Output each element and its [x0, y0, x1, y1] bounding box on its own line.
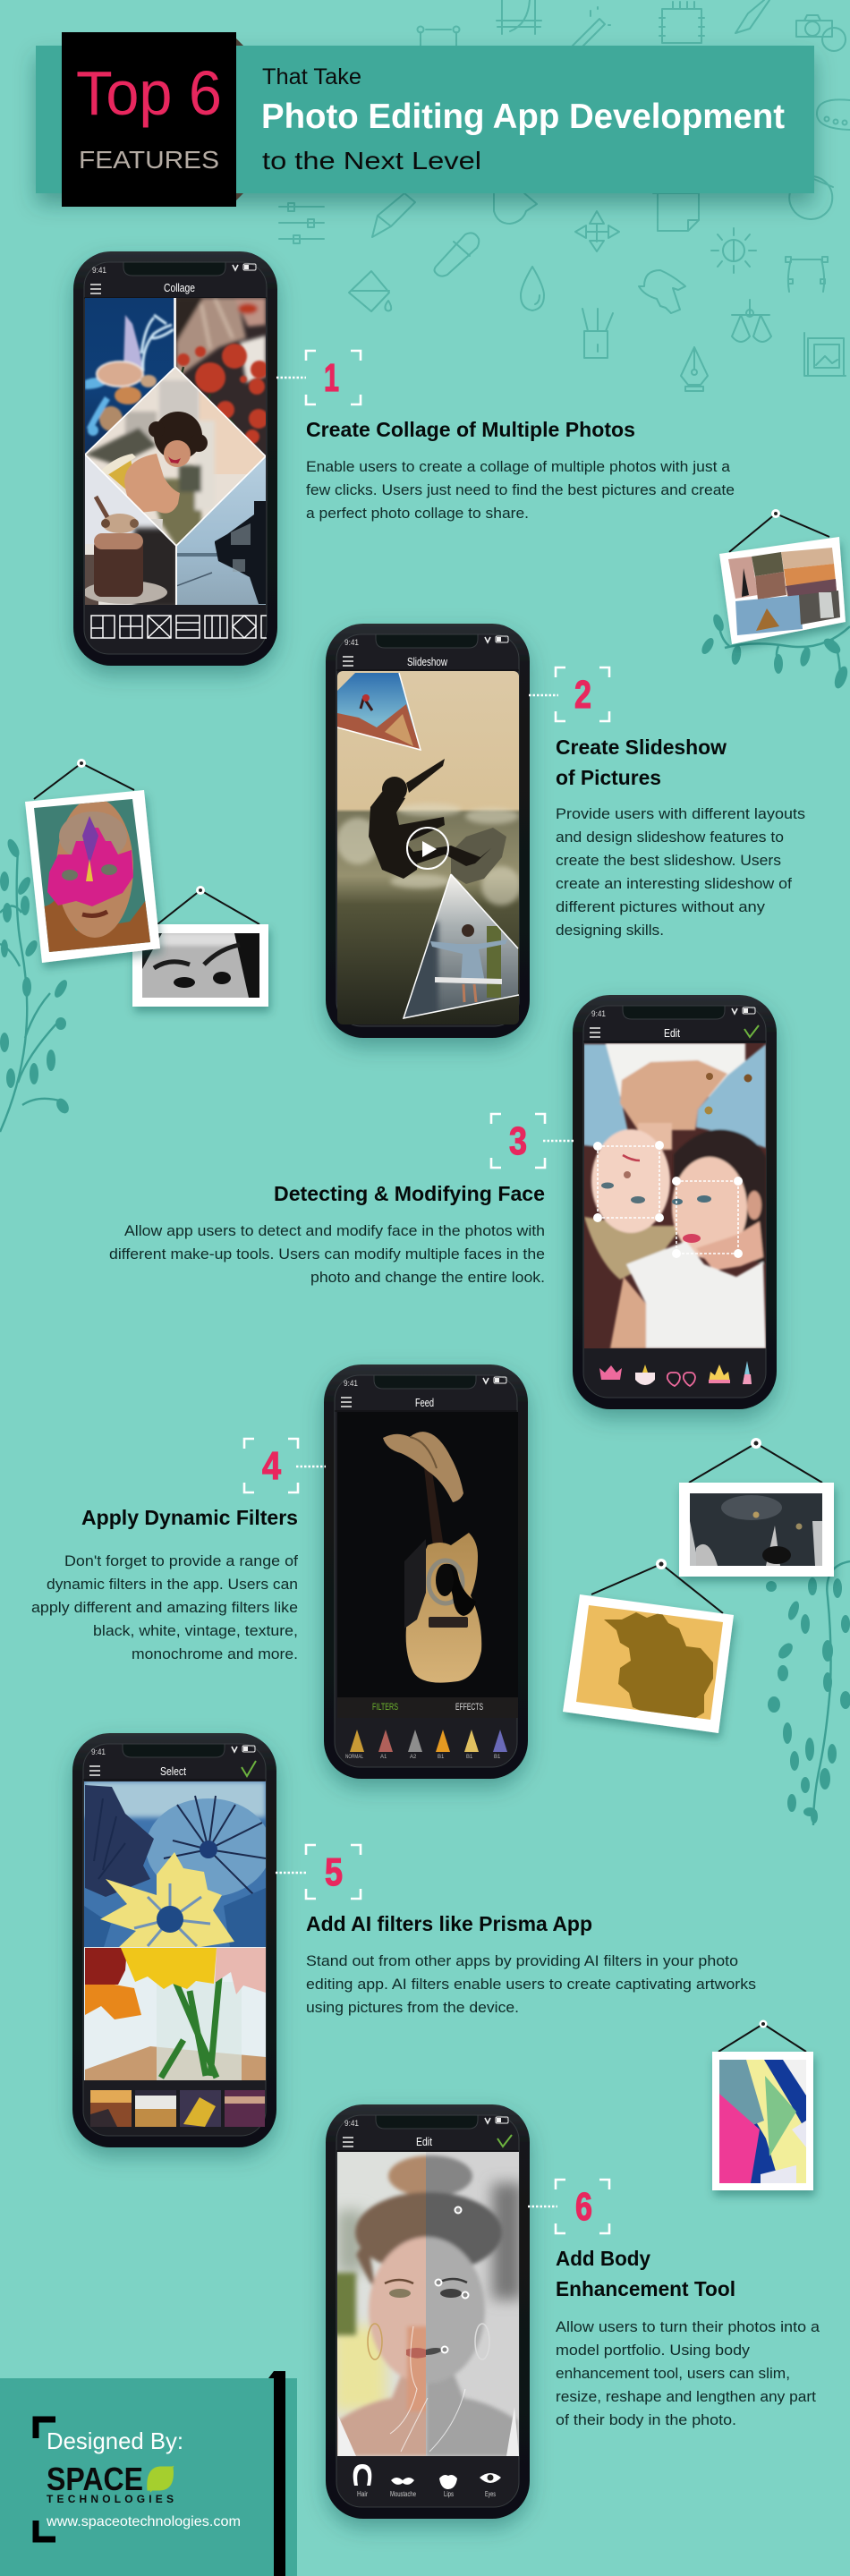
- tool icons: [353, 2464, 501, 2489]
- feature 6: heading: Enhancement Tool: [556, 2277, 735, 2300]
- feature 4: description: apply different and amazing filters like: [31, 1600, 298, 1616]
- phone 3: edit: [573, 995, 777, 1409]
- tool labels: Moustache: [390, 2490, 416, 2498]
- feature 4: description: monochrome and more.: [132, 1646, 298, 1662]
- hanging frame 1: [719, 509, 846, 644]
- feature 2: number marker: [529, 667, 609, 721]
- footer band: [0, 2378, 297, 2576]
- website: www.spaceotechnologies.com: [46, 2514, 241, 2529]
- logo: TECHNOLOGIES: [47, 2493, 174, 2505]
- hanging frame 2: [25, 759, 160, 963]
- tabs: FILTERS: [372, 1702, 398, 1713]
- feature 2: description: and design slideshow features to: [556, 829, 784, 846]
- hanging frame 5: [563, 1559, 734, 1733]
- feature 5: number marker: [276, 1845, 361, 1899]
- feature 6: heading: Add Body: [556, 2247, 650, 2270]
- feature 5: description: [306, 1953, 756, 2016]
- two women photo: [583, 1043, 766, 1348]
- status time: 9:41: [91, 1747, 106, 1756]
- phone frame: [326, 2104, 530, 2519]
- feature 3: description: different make-up tools. Users can modify multiple faces in the: [109, 1246, 545, 1262]
- footer bar: [268, 2371, 285, 2576]
- slideshow photo: [336, 671, 523, 1024]
- feature 4: description: [31, 1553, 298, 1662]
- feature 2: description: [556, 806, 805, 939]
- feature 6: description: resize, reshape and lengthen any part: [556, 2389, 816, 2405]
- background line icons: [279, 0, 850, 391]
- feature 1: description: a perfect photo collage to share.: [306, 506, 529, 522]
- subtitle bottom: to the Next Level: [262, 147, 481, 174]
- right branch: [766, 1561, 850, 1825]
- thumbnails: [90, 2090, 265, 2127]
- status time: 9:41: [591, 1009, 606, 1018]
- feature 6: number marker: [528, 2180, 609, 2233]
- feature 1: heading: Create Collage of Multiple Photos: [306, 418, 635, 441]
- phone frame: [573, 995, 777, 1409]
- tool labels: Eyes: [485, 2490, 496, 2498]
- painted flower photo: [84, 1781, 271, 2080]
- filter thumbnails: B1: [466, 1755, 473, 1760]
- play button: [407, 828, 448, 869]
- phone 5: select: [72, 1733, 276, 2147]
- phone frame: [324, 1365, 528, 1779]
- header banner: [36, 32, 814, 207]
- hanging frame 4: [679, 1438, 834, 1577]
- screen title: Collage: [164, 281, 195, 294]
- feature 2: description: Provide users with different layouts: [556, 806, 805, 822]
- banner fold: [236, 38, 243, 200]
- title: Top 6: Top 6: [76, 58, 222, 128]
- feature 2: description: create an interesting slideshow of: [556, 876, 792, 892]
- feature 6: description: enhancement tool, users can slim,: [556, 2366, 790, 2382]
- feature 1: description: Enable users to create a collage of multiple photos with just a: [306, 459, 731, 475]
- feature 6: description: model portfolio. Using body: [556, 2342, 751, 2359]
- check icon: [744, 1025, 759, 1037]
- feature 5: description: editing app. AI filters enable users to create captivating artworks: [306, 1977, 756, 1993]
- feature 5: heading: Add AI filters like Prisma App: [306, 1912, 592, 1935]
- phone frame: [73, 251, 277, 666]
- feature 3: description: [109, 1223, 545, 1286]
- feature 4: description: dynamic filters in the app. Users can: [47, 1577, 298, 1593]
- feature 6: description: [556, 2319, 820, 2428]
- feature 2: description: create the best slideshow. Users: [556, 853, 781, 869]
- feature 6: description: Allow users to turn their photos into a: [556, 2319, 820, 2335]
- feature 2: number marker: 2: [574, 673, 591, 717]
- sticker icons: [599, 1361, 752, 1386]
- feature 1: number marker: 1: [324, 356, 339, 400]
- feature 5: number marker: 5: [325, 1850, 343, 1894]
- screen title: Select: [160, 1764, 186, 1778]
- feature 4: heading: Apply Dynamic Filters: [81, 1506, 298, 1529]
- feature 3: heading: Detecting & Modifying Face: [274, 1182, 545, 1205]
- feature 6: heading: [556, 2247, 735, 2300]
- feature 2: heading: Create Slideshow: [556, 735, 727, 759]
- surfer: [369, 759, 445, 879]
- dark photo area: [337, 1412, 518, 1697]
- screen title: Slideshow: [407, 655, 447, 668]
- tool labels: [357, 2490, 496, 2498]
- filter thumbnails: B1: [494, 1755, 501, 1760]
- feature 4: description: black, white, vintage, texture,: [93, 1623, 298, 1639]
- feature 2: description: different pictures without any: [556, 899, 766, 915]
- designed by: Designed By:: [47, 2427, 183, 2454]
- phone 4: feed: [324, 1365, 528, 1779]
- feature 3: description: Allow app users to detect and modify face in the photos with: [124, 1223, 545, 1239]
- feature 1: description: [306, 459, 735, 522]
- check icon: [497, 2135, 512, 2147]
- black title box: [62, 32, 236, 207]
- screen title: Edit: [664, 1026, 680, 1040]
- check icon: [242, 1761, 256, 1776]
- face detection boxes: [593, 1141, 743, 1258]
- feature 3: description: photo and change the entire look.: [310, 1270, 545, 1286]
- filter thumbnails: NORMAL: [345, 1755, 364, 1760]
- tool labels: Lips: [444, 2490, 454, 2498]
- portrait photo: [333, 2152, 523, 2456]
- feature 5: description: Stand out from other apps by providing AI filters in your photo: [306, 1953, 738, 1969]
- screen title: Edit: [416, 2135, 432, 2148]
- corner brackets: [36, 2419, 55, 2539]
- feature 3: number marker: [491, 1114, 574, 1168]
- phone 1: collage: [73, 251, 277, 666]
- feature 6: description: of their body in the photo.: [556, 2412, 736, 2428]
- branch under frame 1: [700, 613, 850, 690]
- phone 2: slideshow: [326, 624, 530, 1038]
- collage photo: [83, 298, 268, 608]
- feature 1: description: few clicks. Users just need to find the best pictures and create: [306, 482, 735, 498]
- filter thumbnails: B1: [438, 1755, 445, 1760]
- main title: Photo Editing App Development: [261, 98, 785, 136]
- hanging frame 6: [712, 2020, 813, 2190]
- layout icons: [91, 616, 267, 638]
- status time: 9:41: [344, 1379, 358, 1388]
- feature 2: heading: of Pictures: [556, 766, 661, 789]
- title: features: FEATURES: [79, 146, 219, 174]
- feature 4: number marker: [244, 1439, 326, 1492]
- banner band: [36, 46, 814, 193]
- guitar with hat: [383, 1432, 481, 1683]
- feature 2: heading: [556, 735, 727, 789]
- feature 3: number marker: 3: [509, 1119, 527, 1163]
- logo: SPACE: [47, 2461, 143, 2497]
- hat: [383, 1432, 463, 1502]
- filter thumbnails: A2: [410, 1755, 417, 1760]
- status time: 9:41: [92, 266, 106, 275]
- feature 1: number marker: [276, 351, 361, 404]
- subtitle top: That Take: [262, 64, 361, 89]
- phone frame: [72, 1733, 276, 2147]
- phone frame: [326, 624, 530, 1038]
- filter thumbnails: A1: [380, 1755, 387, 1760]
- feature 4: description: Don't forget to provide a range of: [64, 1553, 298, 1569]
- status time: 9:41: [344, 638, 359, 647]
- left branch: [0, 837, 72, 1132]
- feature 2: description: designing skills.: [556, 922, 664, 939]
- status time: 9:41: [344, 2119, 359, 2128]
- phone 6: edit: [326, 2104, 530, 2519]
- filter thumbnails: [345, 1730, 507, 1760]
- footer panel: [0, 2371, 297, 2576]
- feature 5: description: using pictures from the device.: [306, 2000, 519, 2016]
- tool labels: Hair: [357, 2490, 368, 2498]
- hanging frame 3: [132, 886, 268, 1007]
- tabs: EFFECTS: [455, 1702, 483, 1713]
- screen title: Feed: [415, 1396, 434, 1409]
- tabs: [337, 1697, 518, 1718]
- feature 4: number marker: 4: [262, 1444, 281, 1488]
- feature 6: number marker: 6: [575, 2185, 592, 2229]
